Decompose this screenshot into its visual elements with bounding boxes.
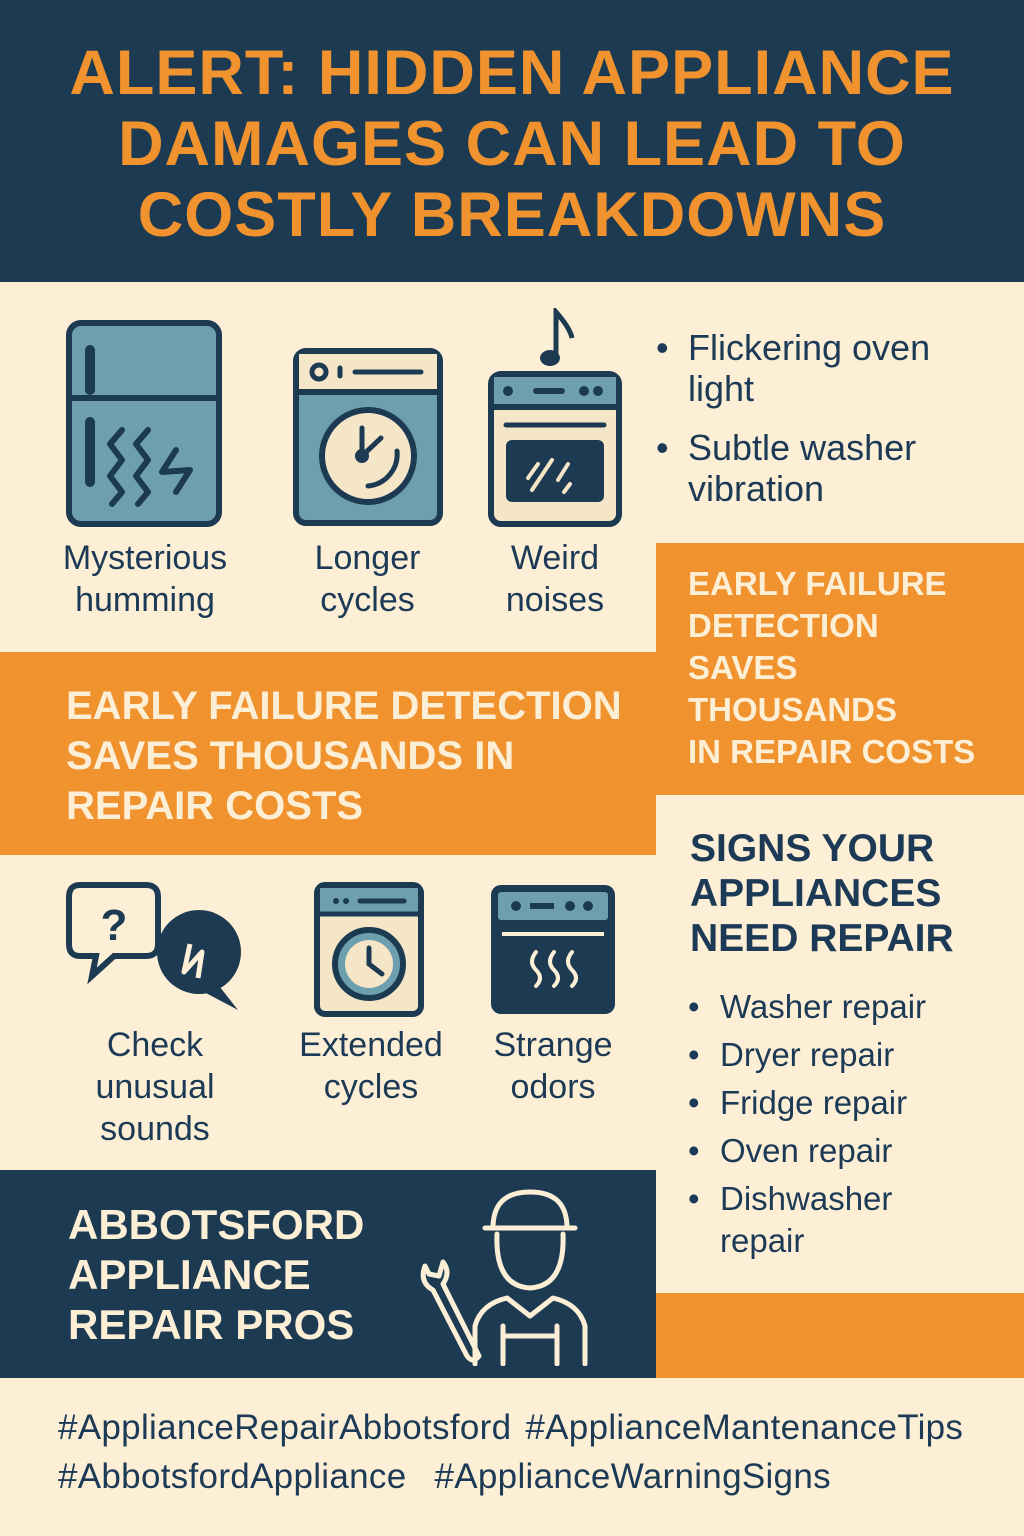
label: strange odors: Strange <box>493 1026 613 1064</box>
icon: washer 2 <box>314 882 424 1017</box>
label: check unusual sounds: sounds <box>100 1110 210 1148</box>
icon: fridge <box>66 320 222 527</box>
bullets: repair list: Oven repair <box>720 1132 892 1169</box>
label: check unusual sounds: unusual <box>95 1068 215 1106</box>
hashtags: #AbbotsfordAppliance #ApplianceWarningSigns <box>58 1457 831 1496</box>
heading: signs: NEED REPAIR <box>690 917 954 960</box>
bullets: repair list: Washer repair <box>720 988 926 1025</box>
bullets: repair list: Dishwasher <box>720 1180 892 1217</box>
panel: orange right callout: THOUSANDS <box>688 691 897 728</box>
label: mysterious humming: Mysterious <box>63 539 227 577</box>
label: extended cycles: cycles <box>324 1068 418 1106</box>
label: mysterious humming: humming <box>75 581 215 619</box>
bullets: top right: light <box>688 368 754 409</box>
bullets: top right <box>657 327 930 509</box>
icon: technician <box>420 1190 588 1366</box>
hashtags: #ApplianceRepairAbbotsford #ApplianceMantenanceTips <box>58 1408 963 1447</box>
panel: orange band: REPAIR COSTS <box>66 784 363 828</box>
label: extended cycles <box>299 1026 443 1106</box>
heading: signs: SIGNS YOUR <box>690 827 934 870</box>
title: ALERT: HIDDEN APPLIANCE <box>69 38 955 108</box>
title: DAMAGES CAN LEAD TO <box>118 109 906 179</box>
heading: signs <box>690 827 954 960</box>
panel: orange right callout: DETECTION <box>688 607 879 644</box>
icon: speech bubbles <box>66 882 241 1010</box>
label: check unusual sounds <box>95 1026 215 1148</box>
label: longer cycles: Longer <box>315 539 420 577</box>
panel: orange right callout <box>656 543 1024 795</box>
title: COSTLY BREAKDOWNS <box>138 180 886 250</box>
heading: signs: APPLIANCES <box>690 872 941 915</box>
brand text <box>68 1201 364 1348</box>
bullets: repair list: repair <box>720 1222 804 1259</box>
bullets: repair list <box>689 988 926 1259</box>
label: check unusual sounds: Check <box>107 1026 203 1064</box>
panel: orange bottom right <box>656 1293 1024 1378</box>
label: mysterious humming <box>63 539 227 619</box>
bullets: repair list: Fridge repair <box>720 1084 907 1121</box>
bullets: top right: Flickering oven <box>688 327 930 368</box>
bullets: top right: vibration <box>688 468 824 509</box>
panel: orange right callout: EARLY FAILURE <box>688 565 947 602</box>
label: weird noises: noises <box>506 581 604 619</box>
label: longer cycles: cycles <box>320 581 415 619</box>
title <box>69 38 955 250</box>
panel: orange band <box>0 652 656 855</box>
panel: orange band: SAVES THOUSANDS IN <box>66 734 514 778</box>
brand text: REPAIR PROS <box>68 1301 354 1348</box>
brand text: APPLIANCE <box>68 1251 311 1298</box>
panel: orange right callout: SAVES <box>688 649 797 686</box>
panel: orange right callout: IN REPAIR COSTS <box>688 733 975 770</box>
label: weird noises <box>506 539 604 619</box>
label: weird noises: Weird <box>511 539 599 577</box>
label: longer cycles <box>315 539 420 619</box>
label: extended cycles: Extended <box>299 1026 443 1064</box>
icon: oven odors <box>491 885 615 1014</box>
icon: speech bubbles: ? <box>101 901 127 950</box>
panel: orange band: EARLY FAILURE DETECTION <box>66 684 622 728</box>
icon: oven with note <box>488 308 622 527</box>
hashtags <box>58 1408 963 1496</box>
brand text: ABBOTSFORD <box>68 1201 364 1248</box>
panel: brand <box>0 1170 656 1378</box>
bullets: repair list: Dryer repair <box>720 1036 894 1073</box>
header <box>0 0 1024 282</box>
label: strange odors: odors <box>510 1068 596 1106</box>
icon: washer <box>293 348 443 526</box>
bullets: top right: Subtle washer <box>688 427 916 468</box>
label: strange odors <box>493 1026 613 1106</box>
